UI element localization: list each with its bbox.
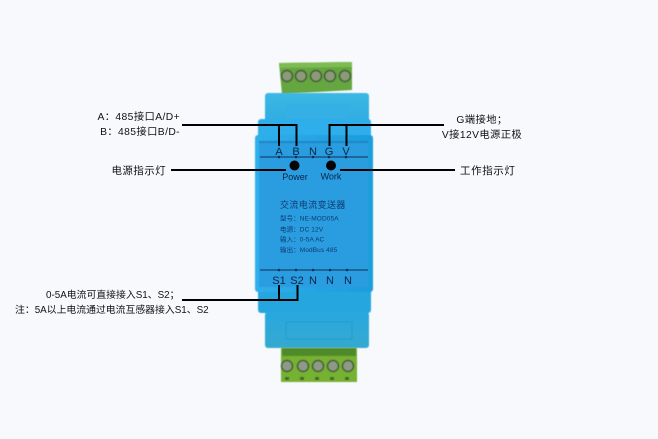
bottom terminal rail [260, 269, 368, 271]
top terminal labels: B [292, 146, 300, 158]
text: A and B terminal notes: B：485接口B/D- [100, 125, 180, 138]
top terminal labels: A [275, 146, 283, 158]
product label: 输入：0-5A AC [280, 234, 325, 244]
text: current input notes: 注：5A以上电流通过电流互感器接入S1、S2 [15, 303, 209, 316]
text: work indicator label: 工作指示灯 [460, 164, 516, 177]
product label: 型号：NE-MOD05A [280, 214, 339, 222]
top terminal labels: G [325, 146, 333, 158]
top terminal labels: N [309, 146, 317, 158]
indicator: work [321, 160, 342, 182]
product label [280, 199, 346, 254]
bottom terminal labels: S1 [272, 275, 286, 287]
bottom green terminal block [281, 348, 357, 382]
leader: G and V terminals [330, 124, 444, 146]
blue housing [255, 93, 373, 348]
indicator: work: Work [321, 172, 342, 182]
top green terminal block [279, 62, 352, 94]
product label: 电源：DC 12V [280, 224, 324, 234]
text: current input notes [15, 288, 209, 316]
text: A and B terminal notes [97, 110, 180, 138]
bottom terminal labels: S2 [290, 275, 304, 287]
text: A and B terminal notes: A：485接口A/D+ [97, 110, 180, 123]
top terminal labels [275, 146, 350, 158]
device: current transmitter [255, 62, 373, 382]
top terminal labels: V [342, 146, 350, 158]
text: G and V terminal notes [442, 113, 522, 141]
indicator: power [282, 160, 308, 182]
bottom terminal labels: N [344, 275, 352, 287]
indicator: power: Power [282, 172, 308, 182]
bottom terminal labels [272, 275, 352, 287]
leader: work indicator [340, 169, 455, 171]
leader: A and B terminals [182, 124, 296, 146]
leader: power indicator [171, 169, 286, 171]
text: G and V terminal notes: G端接地； [456, 113, 508, 126]
product label: 交流电流变送器 [280, 199, 346, 210]
leader: S1 and S2 terminals [182, 285, 298, 301]
text: G and V terminal notes: V接12V电源正极 [442, 128, 522, 141]
product label: 输出：ModBus 485 [280, 245, 338, 254]
text: current input notes: 0-5A电流可直接接入S1、S2； [46, 288, 179, 301]
bottom terminal labels: N [309, 275, 317, 287]
bottom terminal labels: N [326, 275, 334, 287]
text: power indicator label: 电源指示灯 [112, 164, 166, 177]
top terminal rail [260, 156, 368, 158]
